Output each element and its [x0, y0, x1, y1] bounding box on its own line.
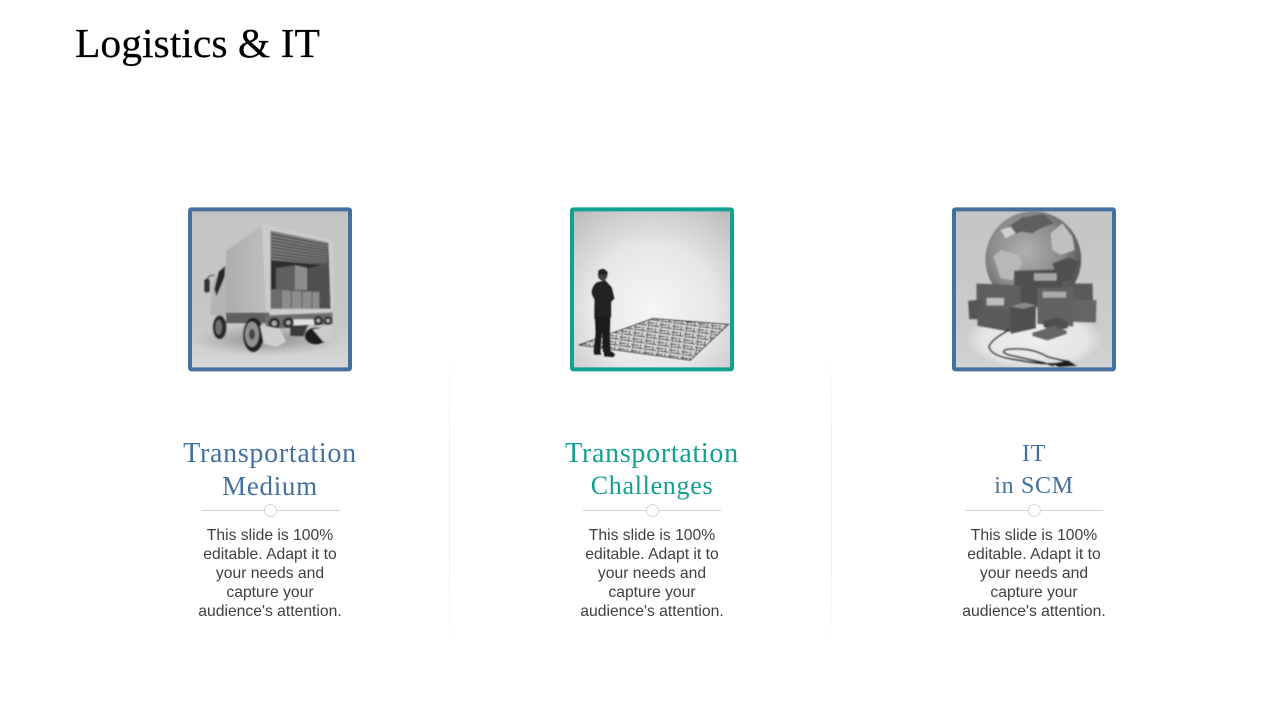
heading: Transportation Challenges: Challenges: [591, 471, 713, 500]
frame: [954, 209, 1114, 369]
heading: Transportation Challenges: [565, 438, 739, 500]
text block: column 2: This slide is 100%: [589, 527, 715, 544]
text block: column 1: capture your: [226, 584, 314, 601]
text block: column 3: editable. Adapt it to: [967, 546, 1101, 563]
heading: IT in SCM: [994, 441, 1074, 499]
column divider 1: [449, 350, 450, 650]
frame: [190, 209, 350, 369]
text block: column 2: capture your: [608, 584, 696, 601]
frame: [572, 209, 732, 369]
text block: column 2: editable. Adapt it to: [585, 546, 719, 563]
panel: globe and parcels photo: [952, 207, 1116, 372]
text block: column 2: audience's attention.: [580, 603, 724, 620]
column divider 2: [831, 350, 832, 650]
text block: column 3: [962, 527, 1106, 620]
heading: IT in SCM: in SCM: [994, 473, 1074, 499]
text block: column 3: This slide is 100%: [971, 527, 1097, 544]
panel: man facing maze photo: [570, 207, 734, 372]
heading: Transportation Medium: Medium: [222, 471, 318, 501]
title: Logistics & IT: [75, 20, 320, 66]
heading: Transportation Challenges: Transportation: [565, 438, 739, 469]
separator with dot: column 3: [965, 504, 1103, 517]
heading: IT in SCM: IT: [1022, 441, 1046, 467]
text block: column 3: audience's attention.: [962, 603, 1106, 620]
text block: column 2: your needs and: [598, 565, 706, 582]
heading: Transportation Medium: Transportation: [183, 438, 357, 469]
text block: column 3: your needs and: [980, 565, 1088, 582]
separator with dot: column 1: [202, 504, 340, 517]
text block: column 1: [198, 527, 342, 620]
text block: column 1: your needs and: [216, 565, 324, 582]
separator with dot: column 2: [583, 504, 721, 517]
text block: column 2: [580, 527, 724, 620]
text block: column 1: audience's attention.: [198, 603, 342, 620]
text block: column 1: editable. Adapt it to: [203, 546, 337, 563]
panel: truck photo: [188, 207, 352, 372]
text block: column 3: capture your: [990, 584, 1078, 601]
heading: Transportation Medium: [183, 438, 357, 501]
text block: column 1: This slide is 100%: [207, 527, 333, 544]
